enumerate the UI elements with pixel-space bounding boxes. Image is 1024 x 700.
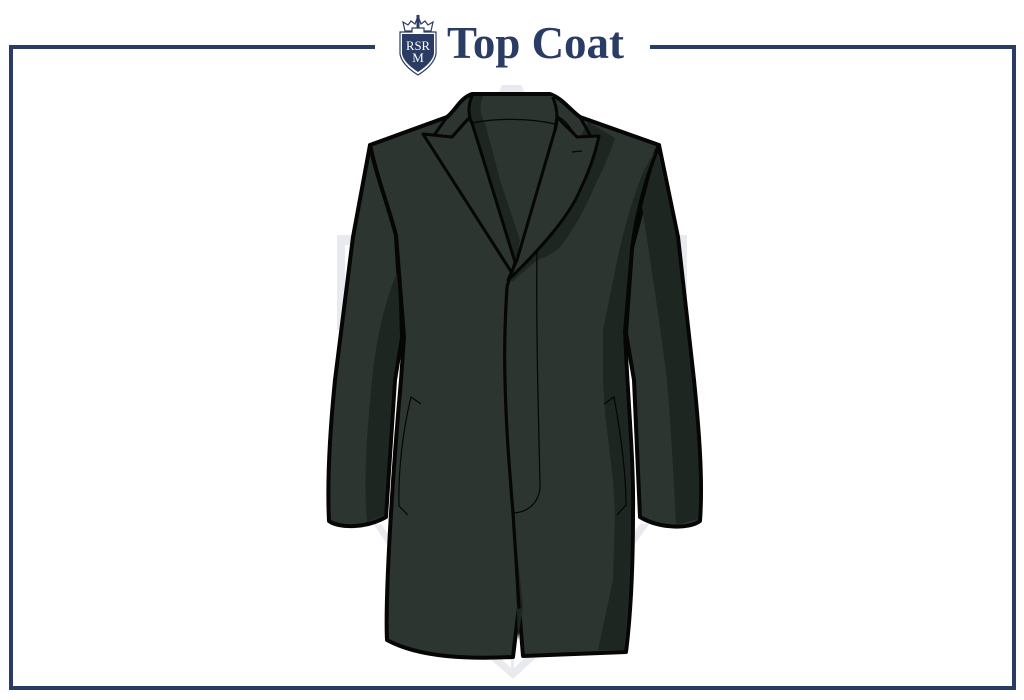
left pocket <box>399 397 421 515</box>
right pocket <box>604 397 626 515</box>
left lapel and collar <box>423 118 515 273</box>
center seam shadow <box>513 513 523 640</box>
right body shadow <box>598 151 656 650</box>
right sleeve <box>626 145 701 527</box>
right lapel and collar <box>508 117 599 280</box>
watermark: faint shield behind coat <box>337 85 687 679</box>
front placket stitching <box>514 252 540 513</box>
title: Top Coat <box>447 18 624 68</box>
thin details: collar seam, gorge, buttonhole, sleeve seams <box>372 116 658 248</box>
inner collar shadow <box>469 96 520 262</box>
inner collar panel <box>469 96 557 262</box>
right sleeve shadow <box>642 149 699 525</box>
icon: crest logo: M <box>412 50 424 65</box>
header: logo and title <box>400 15 624 75</box>
illustration: top coat <box>328 94 701 658</box>
lapel shadow <box>508 122 615 282</box>
icon: crest logo: RSR <box>406 38 430 53</box>
left sleeve <box>328 145 402 526</box>
icon: crest logo <box>400 15 436 75</box>
coat body <box>370 94 659 658</box>
left sleeve shadow <box>366 270 400 522</box>
upper collar leaf edges <box>435 96 590 607</box>
